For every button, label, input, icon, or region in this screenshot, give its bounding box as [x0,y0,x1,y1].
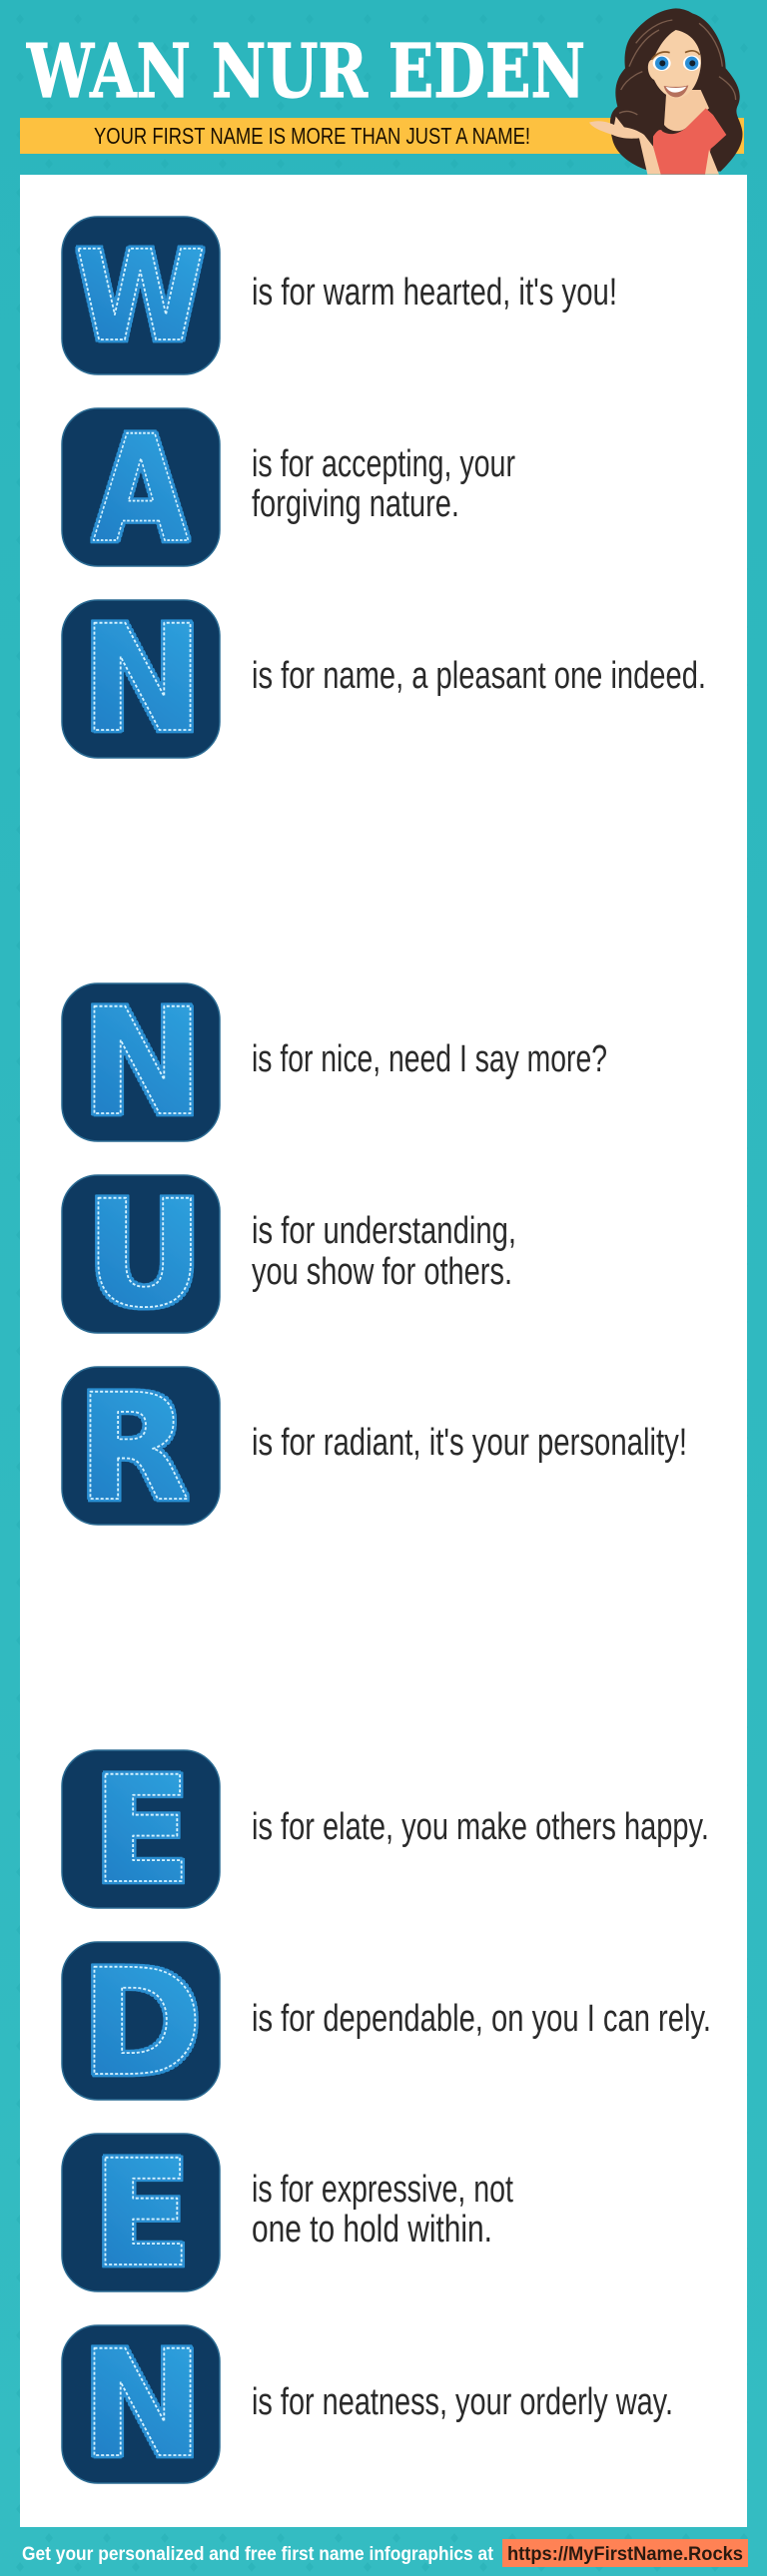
tile A: A [93,404,189,575]
row: E [62,2129,513,2299]
row: R [62,1363,687,1534]
tagline banner [20,118,744,154]
row: U [62,1169,516,1340]
row: N [62,977,607,1148]
tile E [62,2129,220,2299]
text E: is for expressive, not [252,2169,513,2211]
text U: you show for others. [252,1251,512,1293]
tile N: N [81,2319,204,2490]
tagline: YOUR FIRST NAME IS MORE THAN JUST A NAME! [94,123,530,149]
illustration: woman presenting [589,8,742,175]
top [653,108,726,175]
row: N [62,2319,673,2490]
text E: one to hold within. [252,2209,492,2251]
tile E: E [92,2129,192,2299]
footer text: Get your personalized and free first name infographics at [22,2544,494,2565]
row: E [62,1745,709,1916]
text N: is for nice, need I say more? [252,1038,607,1080]
footer link: https://MyFirstName.Rocks [507,2544,743,2565]
text U: is for understanding, [252,1210,516,1252]
row: W [62,217,617,374]
eyes [653,56,700,71]
row: N [62,594,706,765]
title: WAN NUR EDEN [26,29,585,115]
footer [22,2539,748,2567]
row: A [62,404,515,575]
arms [589,117,661,175]
text W: is for warm hearted, it's you! [252,272,617,314]
tile N: N [81,594,204,765]
smile [664,85,688,97]
tile U: U [85,1169,204,1340]
tile R: R [77,1363,190,1534]
tile E [62,1745,220,1916]
row: D [62,1938,711,2109]
tile D: D [81,1938,203,2109]
tile N: N [81,977,204,1148]
text A: is for accepting, your [252,443,515,485]
text A: forgiving nature. [252,483,459,525]
tile W: W [75,225,206,369]
tile E: E [92,1745,192,1916]
